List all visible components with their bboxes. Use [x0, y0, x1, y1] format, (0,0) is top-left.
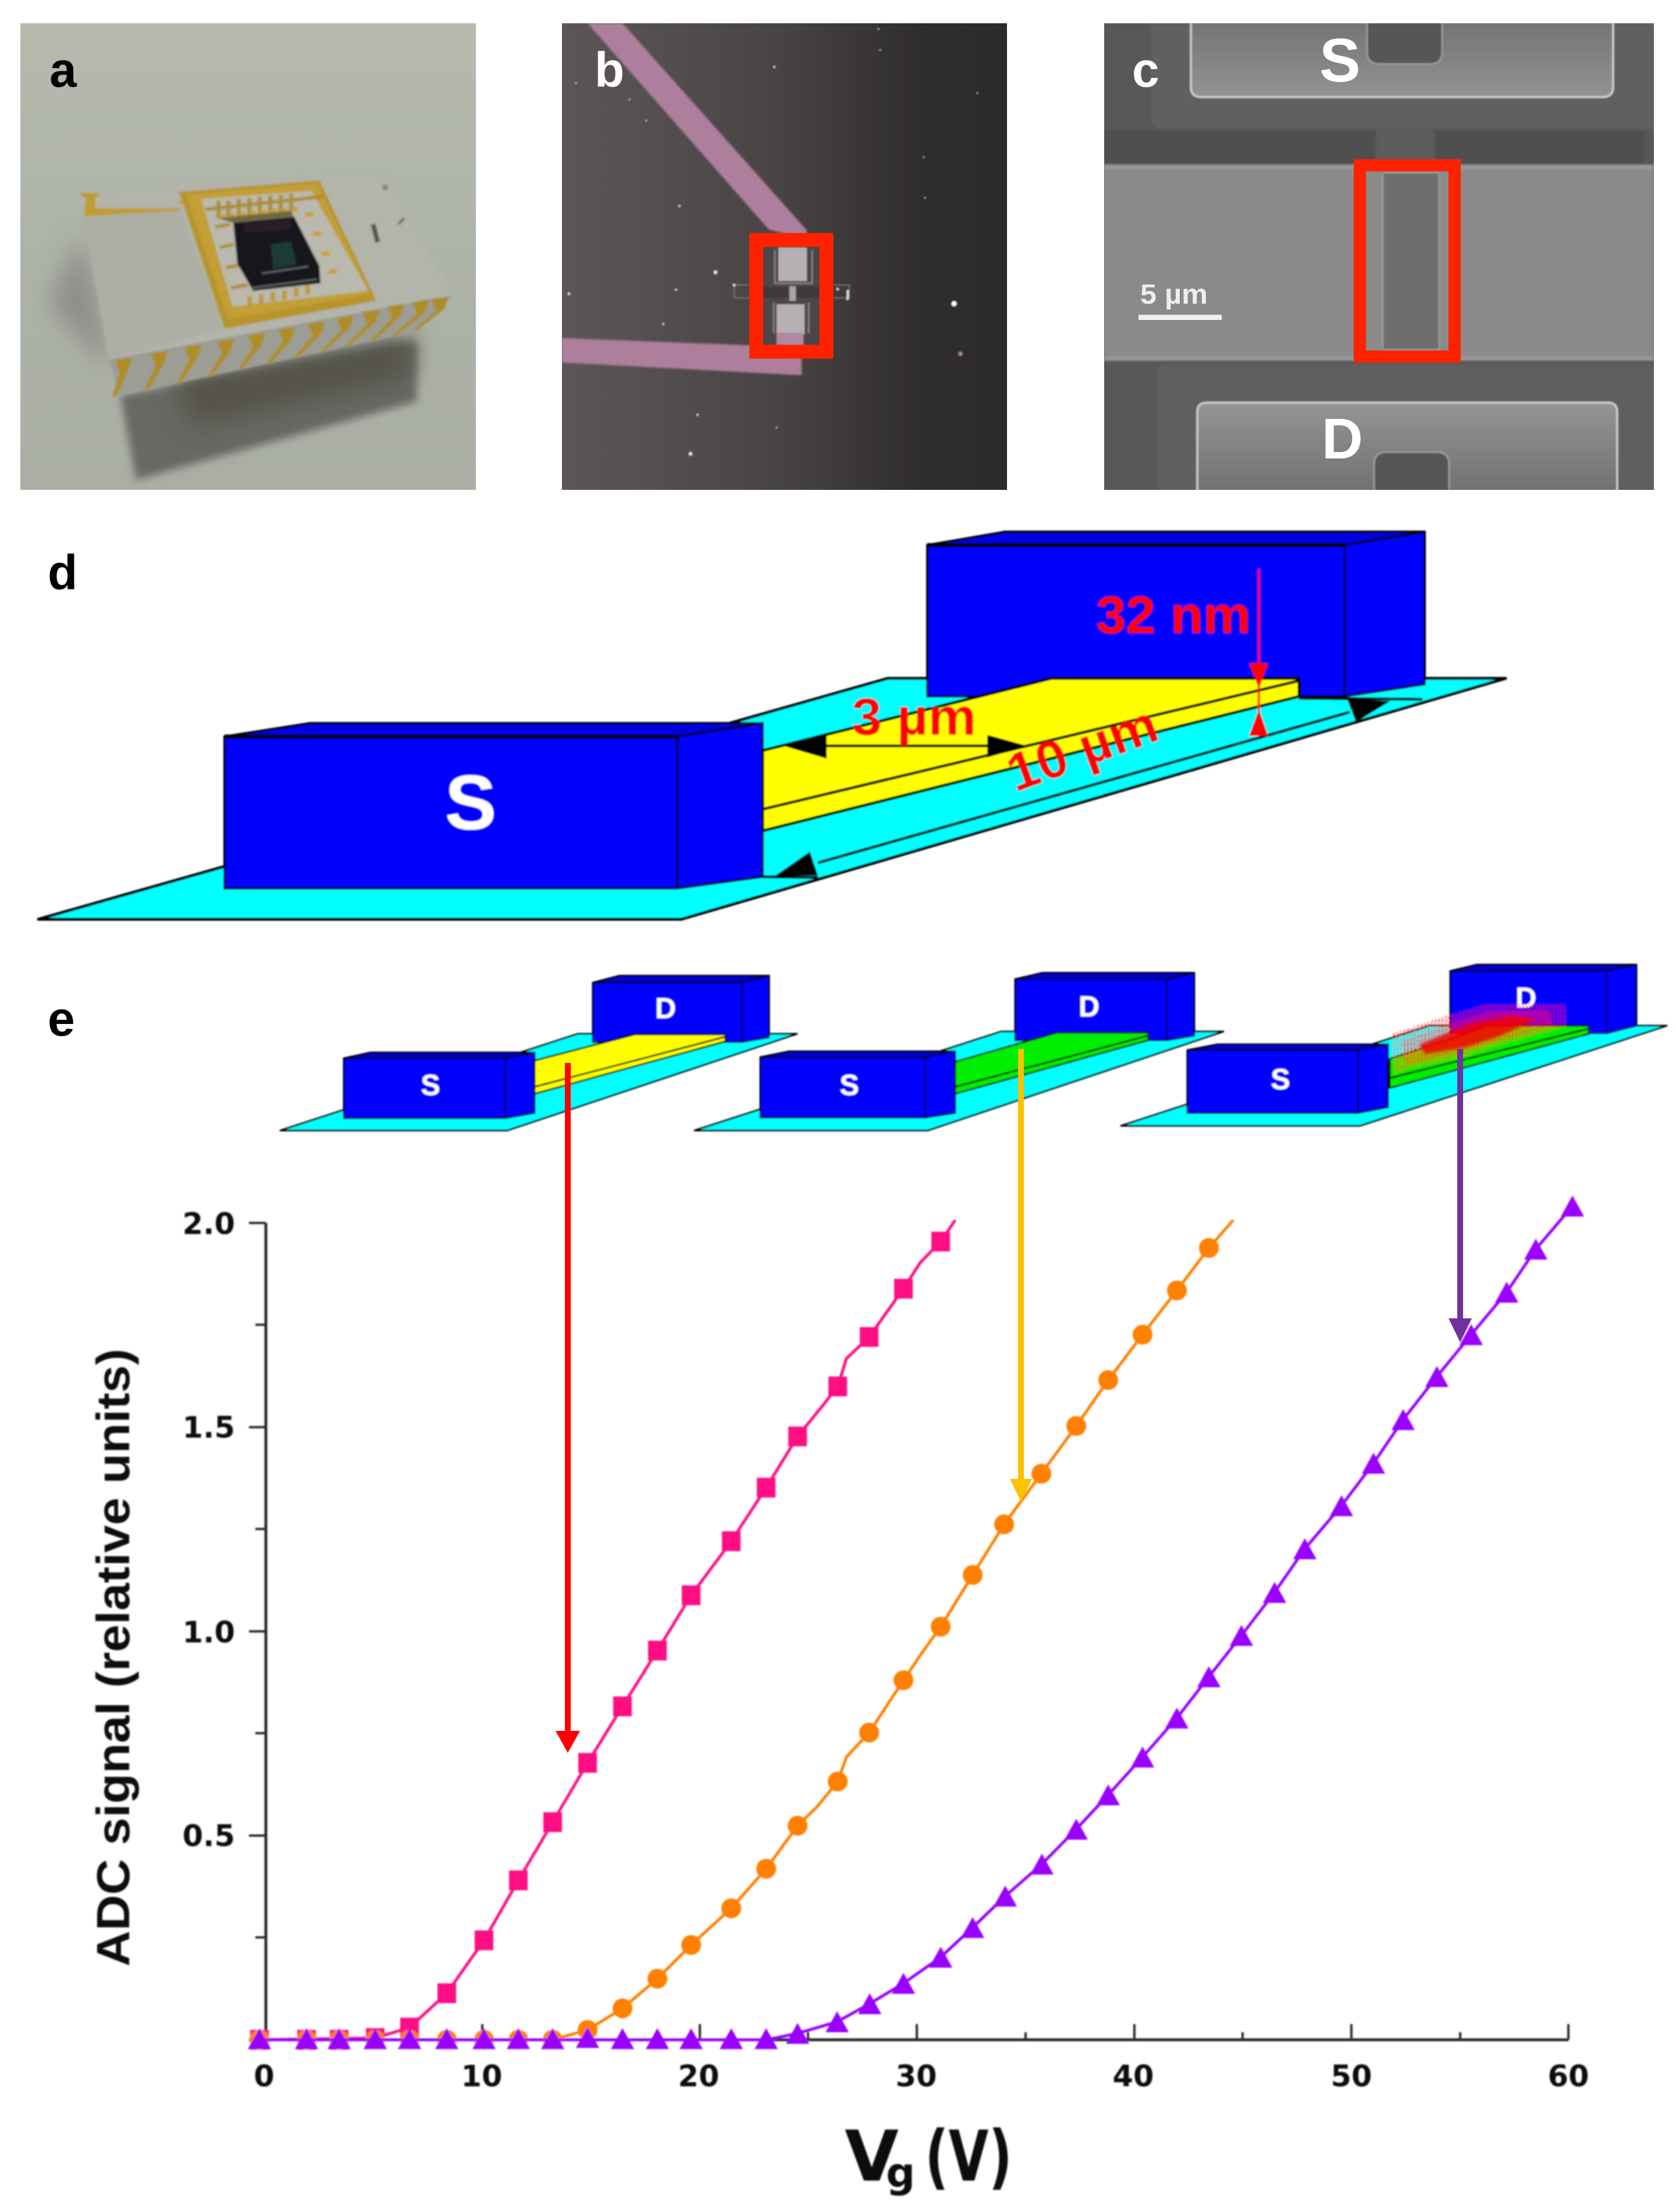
label a: a	[49, 42, 77, 97]
label S: S	[1271, 1063, 1290, 1096]
axes	[249, 1223, 1568, 2040]
shadow under chip	[49, 233, 417, 480]
device pads	[734, 247, 849, 345]
label S: S	[421, 1069, 440, 1101]
arrow: purple	[1449, 1049, 1472, 1342]
x tick labels	[254, 2060, 1589, 2094]
label S: S	[445, 760, 496, 846]
label D: D	[655, 992, 676, 1025]
y tick labels: 0.5	[183, 1819, 235, 1854]
label D: D	[1079, 990, 1099, 1023]
chart: ADC signal vs gate voltage	[87, 1196, 1589, 2197]
y axis title: ADC signal (relative units)	[87, 1349, 139, 1966]
panel a: packaged chip photo	[20, 23, 476, 490]
y tick labels: 1.5	[183, 1411, 235, 1445]
10 um label: 10 µm	[999, 694, 1166, 803]
mini schematic 2: doped film	[695, 973, 1223, 1130]
red molecule cloud	[1392, 1004, 1567, 1075]
scale bar: 5 µm	[1140, 279, 1208, 310]
thickness arrow	[1249, 569, 1268, 736]
width arrow	[784, 735, 1027, 759]
x tick labels: 20	[678, 2060, 719, 2094]
chip package body	[79, 172, 453, 396]
panel b: optical micrograph	[562, 23, 1007, 490]
series 2: orange circles	[259, 1220, 1233, 2040]
red highlight box	[1360, 165, 1454, 357]
pink conductive traces	[562, 23, 807, 375]
x tick labels: 0	[254, 2060, 275, 2094]
x tick labels: 50	[1331, 2060, 1372, 2094]
arrow: red	[556, 1063, 580, 1753]
y tick labels	[183, 1207, 235, 1854]
chip gold pins	[112, 297, 448, 397]
panel d: device schematic	[38, 532, 1506, 919]
source pad	[1191, 21, 1613, 97]
y tick labels: 1.0	[183, 1616, 235, 1650]
x axis title: g	[886, 2149, 915, 2197]
x axis title: (V)	[925, 2117, 1012, 2197]
label c: c	[1132, 42, 1159, 97]
label b: b	[595, 42, 624, 97]
drain block	[927, 532, 1425, 696]
label D: D	[1322, 407, 1363, 471]
channel	[1383, 173, 1439, 350]
panel e label: e	[48, 991, 75, 1046]
x tick labels: 40	[1113, 2060, 1154, 2094]
arrow: amber	[1010, 1049, 1032, 1502]
substrate	[38, 678, 1506, 919]
red highlight box	[756, 240, 826, 351]
3 um label: 3 µm	[852, 688, 976, 746]
panel c: SEM image	[1104, 21, 1654, 492]
label S: S	[1319, 26, 1361, 95]
mini schematic 3: film with molecules	[1121, 965, 1667, 1126]
label D: D	[1515, 981, 1536, 1014]
series 1: pink squares	[250, 1220, 955, 2050]
panel d label: d	[48, 545, 77, 600]
SEM substrate structure	[1104, 23, 1654, 490]
y tick labels: 2.0	[183, 1207, 235, 1242]
x tick labels: 30	[896, 2060, 937, 2094]
source block	[225, 723, 763, 888]
yellow semiconductor film	[763, 678, 1299, 831]
x axis title: V	[845, 2117, 899, 2197]
32 nm label: 32 nm	[1096, 586, 1251, 645]
scale bar	[1138, 279, 1222, 320]
label S: S	[839, 1069, 859, 1101]
specks	[568, 28, 978, 456]
x tick labels: 60	[1548, 2060, 1589, 2094]
mini schematic 1: pristine film	[280, 976, 797, 1130]
x axis title	[845, 2117, 1012, 2197]
drain pad	[1197, 403, 1617, 492]
series 3: purple triangles	[248, 1196, 1584, 2049]
length arrow	[763, 698, 1422, 877]
x tick labels: 10	[461, 2060, 502, 2094]
